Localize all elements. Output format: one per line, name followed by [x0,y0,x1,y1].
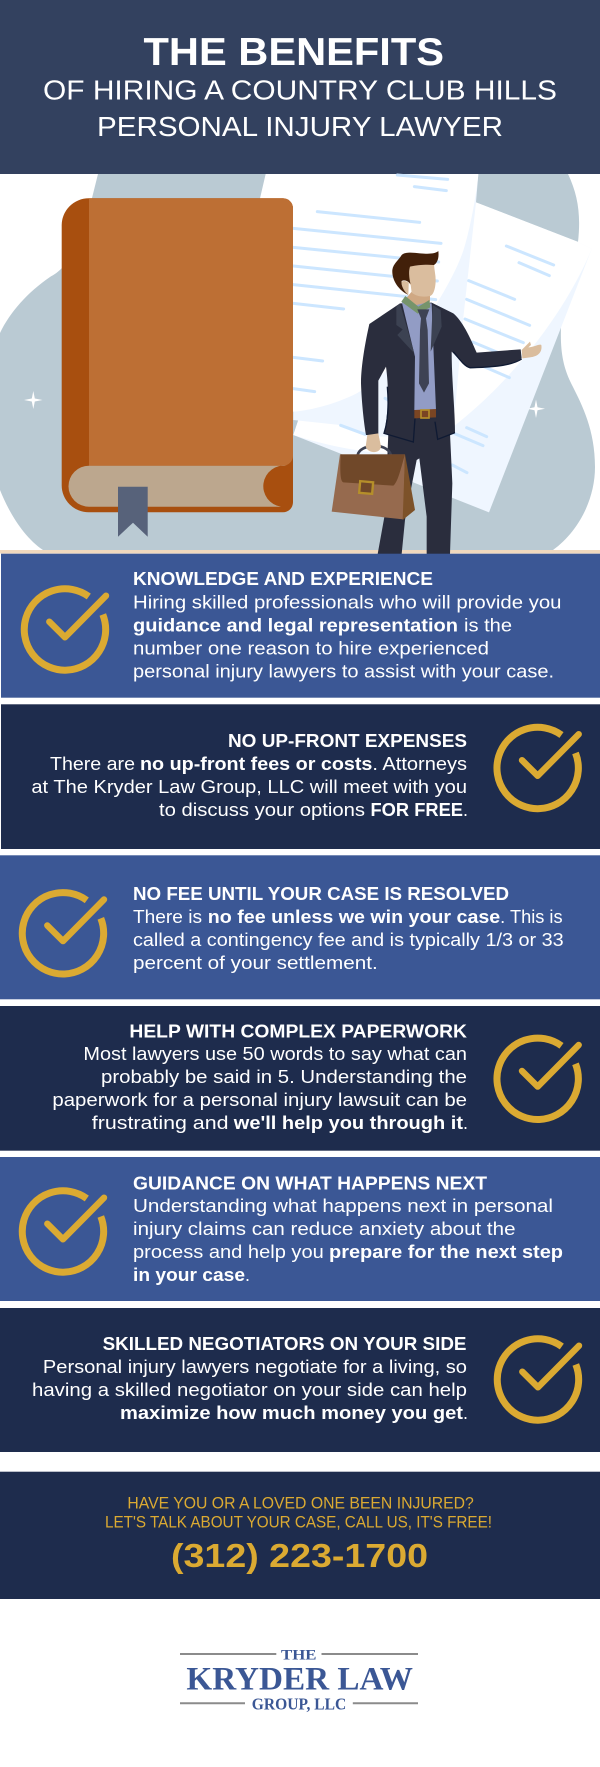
body text: Hiring skilled professionals who will provide you [133,592,562,612]
beige floor line [0,550,600,554]
icon: check circle [24,589,106,670]
phone number: (312) 223-1700 [171,1537,428,1574]
belt [414,409,436,418]
illustration: lawyer with book and documents [0,174,600,554]
icon: check circle [497,1339,579,1420]
panel: guidance on what happens next [0,1157,600,1301]
body text: . This is [500,907,563,927]
body text: There are [50,754,135,774]
logo: The Kryder Law Group, LLC: GROUP, LLC [252,1694,346,1713]
tie [417,309,429,393]
body text: Understanding what happens next in personal [133,1196,553,1216]
body text: having a skilled negotiator on your side can help [32,1380,467,1400]
body text [133,1196,563,1285]
shirt [402,302,436,410]
body text: at The Kryder Law Group, LLC will meet with you [31,777,467,797]
body text: paperwork for a personal injury lawsuit can be [52,1090,467,1110]
body text: no up-front fees or costs [140,754,372,774]
heading: NO FEE UNTIL YOUR CASE IS RESOLVED [133,884,509,904]
body text: Most lawyers use 50 words to say what can [83,1044,467,1064]
body text: guidance and legal representation [133,615,458,635]
holding hand [366,433,381,452]
back document sheet [293,202,592,512]
logo: The Kryder Law Group, LLC [180,1647,418,1713]
panel: skilled negotiators [0,1308,600,1452]
title [43,31,557,142]
body text: we'll help you through it [233,1113,463,1133]
panel: no up-front expenses [1,704,600,849]
jacket outlines [384,352,522,442]
text lines [293,175,554,473]
face [401,264,436,297]
body text [32,1357,468,1423]
front document shadow [293,174,478,437]
body text [133,907,564,973]
icon: check circle [497,1038,579,1119]
body text: prepare for the next step [329,1242,563,1262]
panel: knowledge and experience [1,554,600,698]
neck [406,292,430,305]
body text: is the [464,615,512,635]
body text: personal injury lawyers to assist with your case. [133,661,554,681]
body text: percent of your settlement. [133,953,378,973]
sparkles [24,391,545,418]
title: OF HIRING A COUNTRY CLUB HILLS [43,75,557,106]
trousers [378,417,452,554]
body text [52,1044,468,1133]
body text: injury claims can reduce anxiety about the [133,1219,516,1239]
collar [401,296,430,314]
body text: Personal injury lawyers negotiate for a living, so [43,1357,467,1377]
body text: . [463,1403,468,1423]
body text: in your case [133,1265,245,1285]
call to action text: HAVE YOU OR A LOVED ONE BEEN INJURED? [127,1495,474,1513]
documents [260,174,592,512]
body text: . [245,1265,250,1285]
icon: check circle [22,1191,104,1272]
heading: HELP WITH COMPLEX PAPERWORK [129,1021,467,1041]
title: THE BENEFITS [144,31,444,74]
briefcase [332,446,415,520]
body text: probably be said in 5. Understanding the [101,1067,467,1087]
logo: The Kryder Law Group, LLC: KRYDER LAW [186,1661,413,1697]
body text: . [463,1113,468,1133]
body text [31,754,468,820]
heading: GUIDANCE ON WHAT HAPPENS NEXT [133,1173,487,1193]
hair [392,251,439,295]
icon: check circle [22,893,104,974]
body text: FOR FREE [370,800,463,820]
book pages [68,465,287,507]
lawyer figure [332,251,542,554]
call to action text [105,1495,492,1532]
body text: number one reason to hire experienced [133,638,489,658]
back document white fold [293,202,592,454]
front document sheet [260,174,478,413]
title: PERSONAL INJURY LAWYER [97,111,503,142]
body text: to discuss your options [159,800,365,820]
body text: There is [133,907,202,927]
body text: maximize how much money you get [120,1403,463,1423]
logo: The Kryder Law Group, LLC: THE [281,1647,316,1663]
call to action text: LET'S TALK ABOUT YOUR CASE, CALL US, IT'S FREE! [105,1514,492,1532]
background blob [0,174,595,550]
heading: SKILLED NEGOTIATORS ON YOUR SIDE [103,1334,466,1354]
body text: . Attorneys [372,754,467,774]
body text: process and help you [133,1242,324,1262]
body text: frustrating and [92,1113,228,1133]
book [62,198,293,537]
lapels [396,303,442,353]
body text [133,592,562,681]
body text: called a contingency fee and is typically 1/3 or 33 [133,930,564,950]
jacket [361,303,522,443]
icon: check circle [497,727,579,809]
header panel [0,0,600,174]
call to action panel [0,1472,600,1599]
body text: . [463,800,468,820]
hand [522,342,542,358]
panel: no fee until resolved [0,855,600,999]
body text: no fee unless we win your case [208,907,500,927]
panel: complex paperwork [0,1006,600,1151]
heading: NO UP-FRONT EXPENSES [228,731,467,751]
bookmark [118,487,148,537]
heading: KNOWLEDGE AND EXPERIENCE [133,569,433,589]
